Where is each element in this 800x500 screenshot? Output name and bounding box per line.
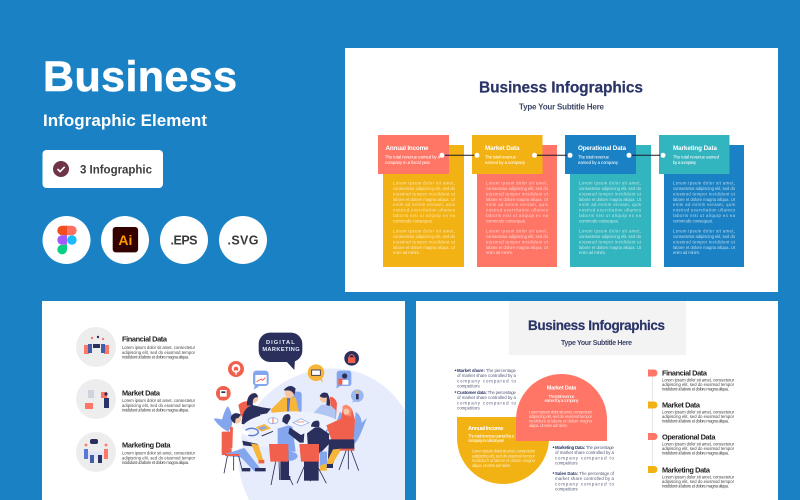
speech bubble: MARKETING (262, 347, 300, 353)
shape: annual income: adipiscing elit, sed do eiusmod tempor (472, 453, 536, 458)
column: marketing data: by a company (673, 160, 697, 165)
column: annual income: laboris nisi ut aliquip ex ea (393, 213, 456, 218)
shape: market data: adipiscing elit, sed do eiusmod tempor (529, 414, 593, 419)
column: annual income: consectetur adipiscing elit, sed do (393, 234, 456, 239)
item: market data (76, 379, 196, 419)
column: marketing data: enim ad minim veniam, quis (673, 202, 735, 207)
column: annual income (378, 135, 464, 267)
timeline item: marketing data: Marketing Data (662, 466, 711, 474)
column: market data: nostrud exercitation ullamco (486, 208, 549, 213)
bullet text: marketing and sales: competitors (555, 487, 578, 492)
column: marketing data: laboris nisi ut aliquip ex ea (673, 213, 736, 218)
column: annual income: The total revenue earned by a (385, 154, 441, 160)
heading: Business Infographics (479, 80, 643, 96)
column: marketing data: Marketing Data (673, 145, 717, 152)
bullet text: marketing and sales: company compared to (555, 455, 615, 460)
column: annual income: Annual Income (386, 145, 429, 152)
item: financial data: Financial Data (122, 334, 168, 344)
column: marketing data: The total revenue earned (673, 154, 720, 160)
icon: svg: .SVG (228, 234, 258, 248)
heading block (509, 301, 686, 355)
shape: annual income: company in a fiscal year (468, 438, 505, 443)
item: financial data: incididunt ut labore et dolore magna aliqua. (122, 354, 189, 360)
plants (214, 406, 367, 444)
timeline item: operational data: Lorem ipsum dolor sit amet, consectetur (662, 442, 735, 446)
person: far left white shirt (224, 413, 266, 473)
icon: illustrator: Ai (118, 232, 132, 248)
shape: annual income: Annual Income (468, 426, 504, 432)
item: market data: Lorem ipsum dolor sit amet, consectetur (122, 398, 196, 403)
shape: market data (516, 374, 607, 441)
bullet text: market and customer: Market share: The percentage (457, 368, 517, 373)
column: market data: The total revenue (485, 154, 517, 160)
column: marketing data: labore et dolore magna aliqua. Ut (673, 245, 736, 250)
bullet text: market and customer: of market share controlled by a (457, 373, 517, 378)
column: marketing data: enim ad minim. (673, 250, 700, 255)
timeline (648, 368, 735, 488)
bullet text: marketing and sales: of market share controlled by a (555, 450, 615, 455)
column: operational data: enim ad minim. (579, 250, 606, 255)
timeline item: marketing data: adipiscing elit, sed do eiusmod tempor (662, 479, 735, 484)
column: market data: labore et dolore magna aliqua. Ut (486, 197, 549, 202)
bullet text: market and customer: competitors (457, 406, 480, 411)
column: marketing data: commodo consequat. (673, 218, 713, 223)
column: operational data: labore et dolore magna aliqua. Ut (579, 245, 642, 250)
column: marketing data: consectetur adipiscing elit, sed do (673, 234, 736, 239)
subheading: Type Your Subtitle Here (519, 102, 605, 112)
bullet text: marketing and sales: competitors (555, 461, 578, 466)
timeline item: market data: incididunt ut labore et dolore magna aliqua. (662, 418, 729, 424)
column: market data (472, 135, 557, 267)
bullet text: marketing and sales: Sales Data: The percentage of (555, 471, 615, 476)
column: annual income: Lorem ipsum dolor sit amet, (393, 228, 455, 234)
chairs behind table (222, 392, 337, 455)
column: market data: enim ad minim. (486, 250, 513, 255)
shape: market data: The total revenue (548, 394, 575, 399)
shape: market data: aliqua. Ut enim ad minim. (529, 423, 568, 428)
column: market data: enim ad minim veniam, quis (486, 202, 548, 207)
column: operational data: eiusmod tempor incididunt ut (579, 239, 642, 244)
column: market data: eiusmod tempor incididunt ut (486, 191, 549, 196)
column: annual income: labore et dolore magna aliqua. Ut (393, 245, 456, 250)
item: financial data (76, 327, 196, 367)
bullet text: market and customer: competitors (457, 384, 480, 389)
person: far right orange top (324, 405, 359, 471)
column: marketing data: nostrud exercitation ullamco (673, 208, 736, 213)
timeline item: marketing data: incididunt ut labore et dolore magna aliqua. (662, 484, 729, 488)
timeline item: financial data (648, 368, 735, 392)
timeline item: financial data: incididunt ut labore et dolore magna aliqua. (662, 386, 729, 392)
column: operational data: commodo consequat. (579, 218, 619, 223)
shape: market data: earned by a company (544, 398, 579, 403)
column: annual income: company in a fiscal year (385, 160, 431, 165)
column: marketing data: eiusmod tempor incididunt ut (673, 239, 736, 244)
timeline item: operational data: incididunt ut labore et dolore magna aliqua. (662, 450, 729, 456)
column: operational data: The total revenue (578, 154, 610, 160)
column: market data: laboris nisi ut aliquip ex ea (486, 213, 549, 218)
column: marketing data (659, 135, 744, 267)
timeline item: market data: Market Data (662, 400, 701, 410)
icon: svg (219, 216, 267, 264)
column: annual income: Lorem ipsum dolor sit amet, (393, 180, 455, 186)
column: operational data: Lorem ipsum dolor sit amet, (579, 228, 641, 234)
column: market data: labore et dolore magna aliqua. Ut (486, 245, 549, 250)
timeline item: financial data: Financial Data (662, 368, 708, 378)
timeline item: operational data: Operational Data (662, 432, 716, 442)
shape: annual income: aliqua. Ut enim ad minim. (472, 463, 511, 468)
column: market data: Lorem ipsum dolor sit amet, (486, 180, 548, 186)
heading block: Business Infographics (528, 318, 665, 333)
column: market data: consectetur adipiscing elit, sed do (486, 186, 549, 191)
item: market data: incididunt ut labore et dolore magna aliqua. (122, 408, 189, 412)
person: yellow shirt (271, 386, 299, 413)
speech bubble: DIGITAL (266, 340, 295, 346)
bullet text: marketing and sales: market share controlled by a (555, 476, 615, 481)
bullet text: market and customer (455, 368, 517, 411)
bullet text: market and customer: company compared to (457, 378, 517, 383)
person: blue top (312, 392, 336, 422)
connector arrows (440, 153, 666, 158)
subtitle: Infographic Element (43, 111, 207, 130)
icon: figma (42, 216, 90, 264)
column: marketing data: labore et dolore magna aliqua. Ut (673, 197, 736, 202)
column: operational data: enim ad minim veniam, quis (579, 202, 641, 207)
column: annual income: nostrud exercitation ullamco (393, 208, 456, 213)
column: operational data: nostrud exercitation ullamco (579, 208, 642, 213)
bullet text: market and customer: company compared to (457, 400, 517, 405)
timeline item: marketing data: Lorem ipsum dolor sit amet, consectetur (662, 474, 735, 480)
column: market data: Lorem ipsum dolor sit amet, (486, 228, 548, 234)
person: front blue shirt (278, 414, 304, 480)
column: annual income: enim ad minim veniam, quis (393, 202, 455, 207)
item: marketing data: adipiscing elit, sed do eiusmod tempor (122, 455, 196, 460)
timeline item: market data (648, 400, 735, 424)
title: Business (43, 53, 237, 101)
shape: market data: Lorem ipsum dolor sit amet, consectetur (529, 410, 593, 414)
icon: illustrator (101, 216, 149, 264)
icons around the team (216, 351, 364, 403)
column: operational data: eiusmod tempor incididunt ut (579, 191, 642, 196)
icon: eps (160, 216, 208, 264)
column: operational data (565, 135, 651, 267)
heading block: Type Your Subtitle Here (561, 340, 632, 347)
column: market data: Market Data (485, 145, 520, 152)
column: operational data: Lorem ipsum dolor sit amet, (579, 180, 641, 186)
shape: market data: Market Data (547, 386, 577, 392)
bullet text: market and customer: of market share controlled by a (457, 395, 517, 400)
bullet text: market and customer: Customer data: The percentage (457, 390, 517, 395)
panel: digital marketing (42, 301, 405, 500)
person: front dark shirt (304, 421, 329, 481)
column: annual income: consectetur adipiscing elit, sed do (393, 186, 456, 191)
column: operational data: labore et dolore magna aliqua. Ut (579, 197, 642, 202)
column: market data: eiusmod tempor incididunt ut (486, 239, 549, 244)
column: annual income: commodo consequat. (393, 218, 433, 223)
timeline item: operational data: adipiscing elit, sed do eiusmod tempor (662, 446, 735, 451)
speech bubble (259, 333, 302, 370)
shape: annual income (457, 417, 549, 484)
column: market data: earned by a company (485, 160, 526, 165)
column: annual income: eiusmod tempor incididunt ut (393, 239, 456, 244)
shape: annual income: Lorem ipsum dolor sit amet, consectetur (472, 448, 536, 454)
timeline item: financial data: adipiscing elit, sed do eiusmod tempor (662, 382, 735, 387)
illustration: team meeting (214, 333, 405, 500)
bullet text: marketing and sales: Marketing Data: The percentage (555, 445, 615, 450)
item: financial data: Lorem ipsum dolor sit amet, consectetur (122, 345, 196, 350)
column: annual income: eiusmod tempor incididunt ut (393, 191, 456, 196)
left hero block (42, 53, 267, 264)
timeline item: market data: adipiscing elit, sed do eiusmod tempor (662, 414, 735, 419)
column: annual income: labore et dolore magna aliqua. Ut (393, 197, 456, 202)
panel: overlapping shapes and timeline (416, 301, 778, 500)
timeline item: financial data: Lorem ipsum dolor sit amet, consectetur (662, 378, 735, 382)
timeline item: market data: Lorem ipsum dolor sit amet, consectetur (662, 410, 735, 414)
person: under-table legs (242, 441, 264, 463)
shape: market data: incididunt ut labore et dolore magna (529, 418, 593, 424)
shape: annual income: The total revenue earned by a (468, 434, 515, 438)
column: marketing data: Lorem ipsum dolor sit amet, (673, 228, 735, 234)
column: marketing data: eiusmod tempor incididunt ut (673, 191, 736, 196)
timeline item: operational data (648, 432, 735, 456)
badge: 3 infographic (42, 150, 163, 188)
item: market data: Market Data (122, 388, 161, 398)
front chairs (269, 444, 326, 485)
item: marketing data: Marketing Data (122, 440, 171, 450)
column: operational data: earned by a company (578, 160, 619, 165)
column: operational data: consectetur adipiscing elit, sed do (579, 234, 642, 239)
bullet text: marketing and sales: company compared to (555, 481, 615, 486)
column: marketing data: Lorem ipsum dolor sit amet, (673, 180, 735, 186)
bullet text: marketing and sales (553, 445, 615, 492)
item: financial data: adipiscing elit, sed do eiusmod tempor (122, 350, 196, 355)
column: marketing data: consectetur adipiscing elit, sed do (673, 186, 736, 191)
item: marketing data: incididunt ut labore et dolore magna aliqua. (122, 460, 189, 465)
timeline item: marketing data (648, 466, 735, 488)
badge: 3 infographic: 3 Infographic (80, 164, 153, 176)
column: operational data: laboris nisi ut aliquip ex ea (579, 213, 642, 218)
column: annual income: enim ad minim. (393, 250, 420, 255)
column: operational data: Operational Data (578, 145, 626, 152)
item: market data: adipiscing elit, sed do eiusmod tempor (122, 403, 196, 408)
column: market data: consectetur adipiscing elit, sed do (486, 234, 549, 239)
item: marketing data: Lorem ipsum dolor sit amet, consectetur (122, 450, 196, 456)
shape: annual income: incididunt ut labore et dolore magna (472, 458, 536, 463)
table (241, 411, 346, 450)
icon: eps: .EPS (170, 234, 198, 248)
pale backdrop circle (238, 368, 405, 500)
item: marketing data (76, 432, 196, 472)
column: operational data: consectetur adipiscing elit, sed do (579, 186, 642, 191)
panel: four-column infographic (345, 48, 778, 292)
column: market data: commodo consequat. (486, 218, 526, 223)
person: dark top (242, 393, 271, 425)
